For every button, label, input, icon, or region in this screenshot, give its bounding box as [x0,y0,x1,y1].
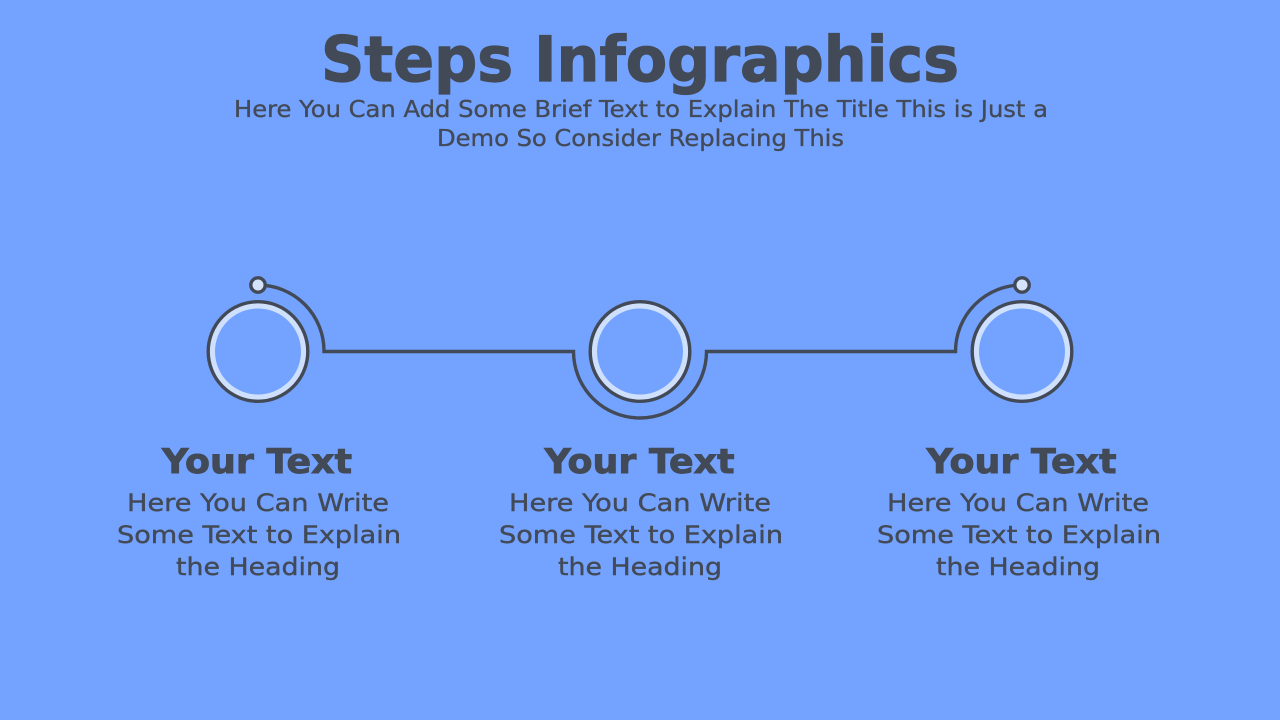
step 1 node [208,278,308,401]
step 2 text: Your Text [543,442,734,482]
title: Steps Infographics [321,23,959,96]
step 3 text: the Heading [936,553,1100,581]
step 1 text: Here You Can Write [127,489,389,517]
connector line [258,285,1022,418]
step 1 text: Your Text [161,442,352,482]
step 3 text: Here You Can Write [887,489,1149,517]
step 1 text: Some Text to Explain [117,521,401,549]
step 2 text: Here You Can Write [509,489,771,517]
step 3 text [877,442,1161,581]
subtitle [234,97,1048,152]
step 3 node [972,278,1072,401]
step 2 text [499,442,783,581]
step 2 text: Some Text to Explain [499,521,783,549]
step 2 text: the Heading [558,553,722,581]
step 2 node [590,302,690,401]
step 3 text: Some Text to Explain [877,521,1161,549]
step 3 text: Your Text [925,442,1116,482]
step 1 text: the Heading [176,553,340,581]
step 1 text [117,442,401,581]
subtitle: Here You Can Add Some Brief Text to Explain The Title This is Just a [234,97,1048,123]
subtitle: Demo So Consider Replacing This [437,126,844,152]
